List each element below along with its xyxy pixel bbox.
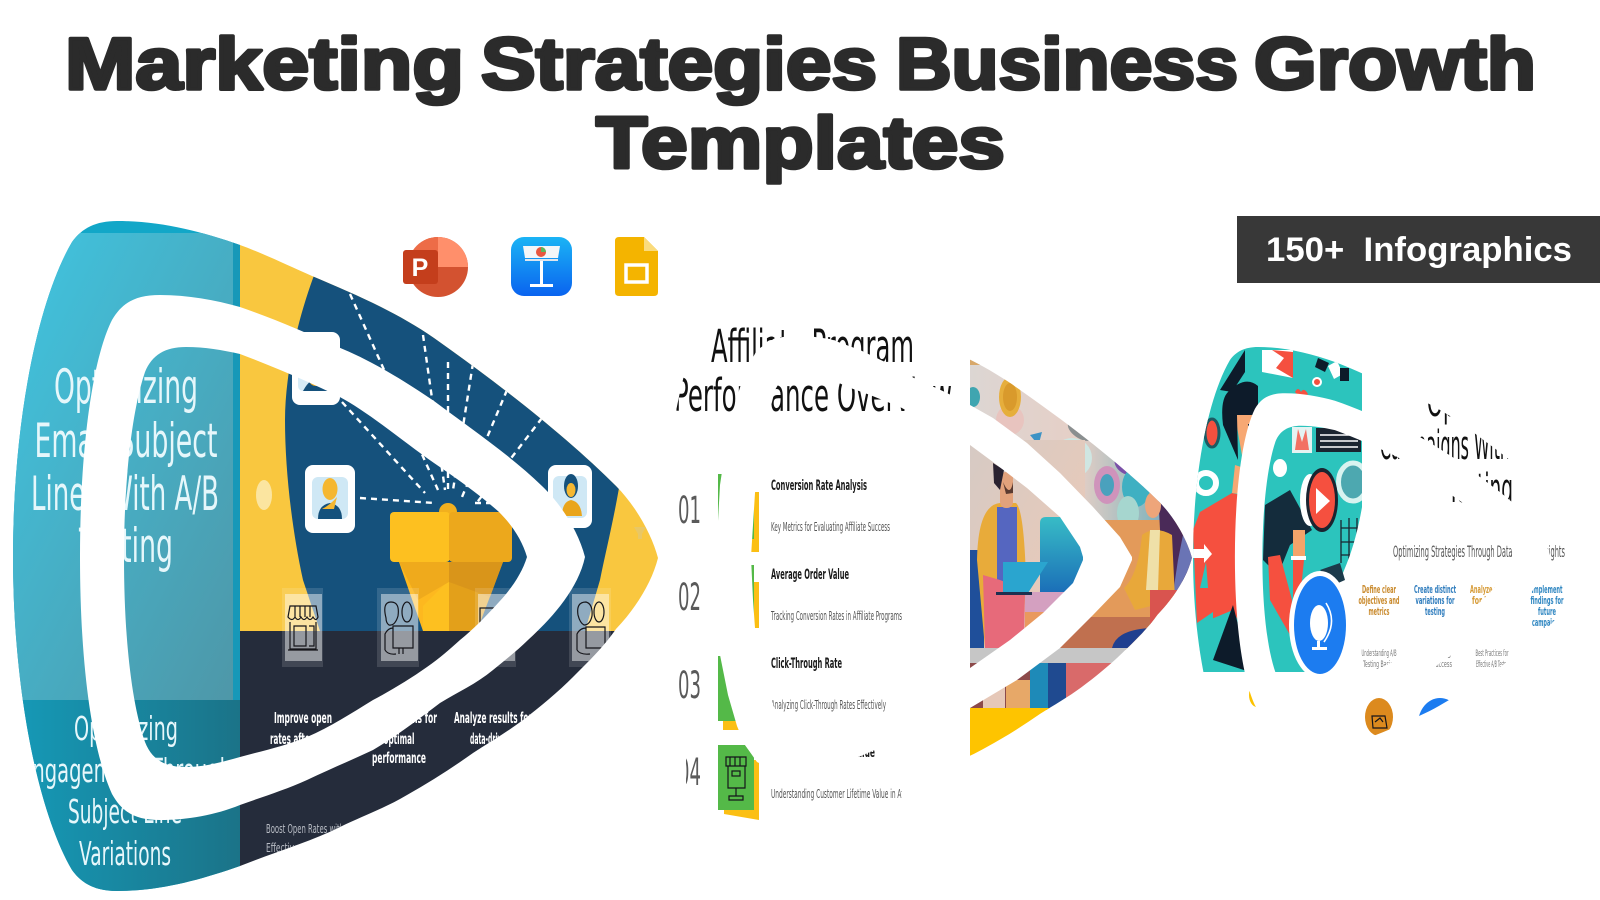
tablet screen bbox=[1040, 517, 1084, 592]
badge: 150+ Infographics bbox=[1237, 216, 1600, 283]
title: Strategies bbox=[481, 24, 877, 105]
slide heading bbox=[676, 328, 951, 412]
panel: A/B testing campaign slide and megaphone illustration: Create distinct bbox=[1414, 583, 1456, 596]
icon: yellow sliver bbox=[1249, 683, 1265, 707]
title bbox=[65, 24, 1536, 184]
dark tile behind badge bbox=[1320, 563, 1345, 584]
column: define: metrics bbox=[1368, 605, 1390, 618]
slide subheading panel: Engagement Through bbox=[20, 751, 232, 790]
panel: A/B testing campaign slide and megaphone illustration: variations for bbox=[1416, 594, 1455, 607]
yellow and navy funnel scene bbox=[240, 245, 658, 631]
step labels bbox=[270, 709, 532, 767]
captions: Key Success bbox=[1422, 660, 1452, 670]
blue globe badge bbox=[1289, 571, 1351, 679]
slide heading panel: Optimizing bbox=[54, 360, 198, 415]
icon box: shop bbox=[282, 588, 323, 667]
slide subheading panel: Subject Line bbox=[68, 792, 182, 831]
icon: orange circle badge bbox=[1365, 698, 1393, 736]
row 04 bbox=[686, 745, 902, 820]
footer caption: Boost Open Rates with bbox=[266, 822, 344, 836]
woman bbox=[1124, 493, 1192, 624]
row 03: 03 bbox=[678, 664, 701, 707]
badge: 150+ Infographics: 150+ Infographics bbox=[1266, 231, 1572, 269]
dark footer band bbox=[240, 631, 614, 866]
row 01: 01 bbox=[678, 489, 701, 532]
row 03: Click-Through Rate bbox=[771, 656, 842, 672]
title: Growth bbox=[1254, 24, 1536, 105]
slide heading: Testing bbox=[1448, 466, 1513, 512]
panel: A/B testing campaign slide and megaphone illustration: Best Practices for bbox=[1476, 649, 1509, 659]
tiny caption fragment: H bbox=[996, 741, 1001, 748]
icon: person card right bbox=[548, 465, 592, 528]
step labels: rates after tests bbox=[270, 730, 336, 748]
panel: affiliate program slide and team illustration: Key Metrics for Evaluating Affiliate Success bbox=[771, 520, 890, 534]
illustration: team at laptop bbox=[970, 360, 1192, 756]
yellow base bbox=[970, 708, 1050, 756]
slide subheading panel: Variations bbox=[79, 834, 171, 873]
icon: filter on yellow bbox=[634, 527, 646, 539]
slide heading bbox=[1380, 380, 1537, 512]
slide heading: Affiliate Program bbox=[711, 320, 914, 373]
footer caption: Effective Subject Lines bbox=[266, 841, 351, 855]
column: implement bbox=[1530, 583, 1564, 629]
funnel bbox=[390, 503, 512, 631]
row 04: 04 bbox=[678, 751, 701, 794]
icon: person card top bbox=[292, 332, 340, 405]
row 01: Conversion Rate Analysis bbox=[771, 478, 867, 494]
white ring overlay bbox=[716, 335, 1132, 774]
icon: person card left bbox=[305, 465, 355, 533]
panel: email subject line slide: Analyze results for bbox=[454, 709, 532, 727]
icon: PowerPoint: P bbox=[412, 254, 428, 282]
captions: Understanding A/B bbox=[1362, 649, 1396, 659]
slide heading panel: Testing bbox=[78, 519, 173, 574]
grey divider band bbox=[970, 648, 1128, 663]
lower scene bbox=[970, 663, 1126, 710]
icon: PowerPoint bbox=[403, 237, 468, 297]
icon box: chart screen bbox=[475, 588, 516, 667]
captions: Testing Basics bbox=[1362, 660, 1395, 670]
inner backdrop bbox=[970, 440, 1085, 650]
right edge cover bbox=[1328, 340, 1366, 690]
icon box: person with chat bbox=[569, 588, 611, 667]
icon box: person with laptop bbox=[377, 588, 419, 667]
column: analyze bbox=[1470, 583, 1514, 607]
captions: Measuring bbox=[1419, 649, 1451, 659]
panel: affiliate program slide and team illustration: Understanding Customer Lifetime Value in Affiliate Marketing bbox=[771, 787, 951, 801]
panel: email subject line slide bbox=[0, 200, 670, 900]
column: define: Define clear bbox=[1362, 583, 1396, 596]
column: implement: future bbox=[1538, 605, 1556, 618]
panel: affiliate program slide and team illustration: Tracking Conversion Rates in Affiliate Programs bbox=[771, 609, 902, 623]
step labels: data-driven bbox=[470, 730, 510, 748]
upper band icons bbox=[970, 360, 1150, 520]
teal ring bbox=[1338, 463, 1368, 501]
row 01 bbox=[678, 474, 890, 552]
slide heading panel: Email Subject bbox=[34, 414, 218, 469]
top flag and icons bbox=[1220, 350, 1349, 400]
title: Marketing bbox=[65, 24, 464, 105]
column: define bbox=[1358, 583, 1400, 618]
row 03 bbox=[678, 656, 886, 730]
column: analyze: for insights bbox=[1472, 594, 1512, 607]
slide subheading panel: Optimizing bbox=[74, 709, 178, 748]
footer caption bbox=[266, 824, 342, 852]
panel: A/B testing campaign slide and megaphone illustration: Effective A/B Tests bbox=[1476, 660, 1506, 670]
megaphone bbox=[1263, 468, 1338, 635]
panel: affiliate program slide and team illustration bbox=[674, 320, 1210, 820]
captions bbox=[1362, 649, 1509, 670]
step labels: optimal bbox=[384, 730, 414, 748]
text: findings for bbox=[1530, 594, 1564, 607]
column: create: testing bbox=[1425, 605, 1445, 618]
title: Templates bbox=[596, 103, 1005, 184]
icon: Keynote bbox=[511, 237, 572, 296]
white ring overlay bbox=[80, 295, 585, 820]
step labels: performance bbox=[372, 749, 426, 767]
slide heading panel bbox=[0, 233, 233, 700]
slide subheading panel bbox=[22, 700, 240, 891]
panel: A/B testing campaign slide and megaphone illustration: Analyze results bbox=[1470, 583, 1514, 596]
desk scene bbox=[1025, 592, 1155, 648]
text: campaigns bbox=[1532, 616, 1562, 629]
panel: A/B testing campaign slide and megaphone illustration: objectives and bbox=[1358, 594, 1400, 607]
icon: online shop bbox=[726, 757, 746, 800]
column: create bbox=[1414, 583, 1456, 618]
screen and chart bbox=[1273, 427, 1361, 477]
man bbox=[970, 463, 1048, 650]
icon: blue circle badge bbox=[1418, 698, 1462, 750]
panel: affiliate program slide and team illustration: Analyzing Click-Through Rates Effectively bbox=[771, 698, 886, 712]
grid bbox=[1341, 518, 1364, 563]
white ring overlay bbox=[1235, 393, 1551, 721]
panel: A/B testing campaign slide and megaphone illustration bbox=[1185, 340, 1565, 750]
panel: A/B testing campaign slide and megaphone illustration: Implement bbox=[1532, 583, 1562, 596]
row 02: Average Order Value bbox=[771, 567, 849, 583]
slide heading: Performance Overview bbox=[674, 369, 952, 422]
step labels: Test variations for bbox=[359, 709, 437, 727]
row 04: Customer Lifetime Value bbox=[771, 745, 875, 761]
row 02: 02 bbox=[678, 576, 701, 619]
row 02 bbox=[678, 565, 902, 628]
slide heading panel: Lines With A/B bbox=[31, 467, 219, 522]
title: Business bbox=[896, 24, 1238, 105]
step labels: Improve open bbox=[274, 709, 332, 727]
lower right backdrop bbox=[1091, 520, 1192, 650]
illustration: man with megaphone bbox=[1193, 347, 1362, 674]
icon: Google Slides bbox=[615, 237, 658, 296]
man bbox=[1190, 382, 1258, 672]
